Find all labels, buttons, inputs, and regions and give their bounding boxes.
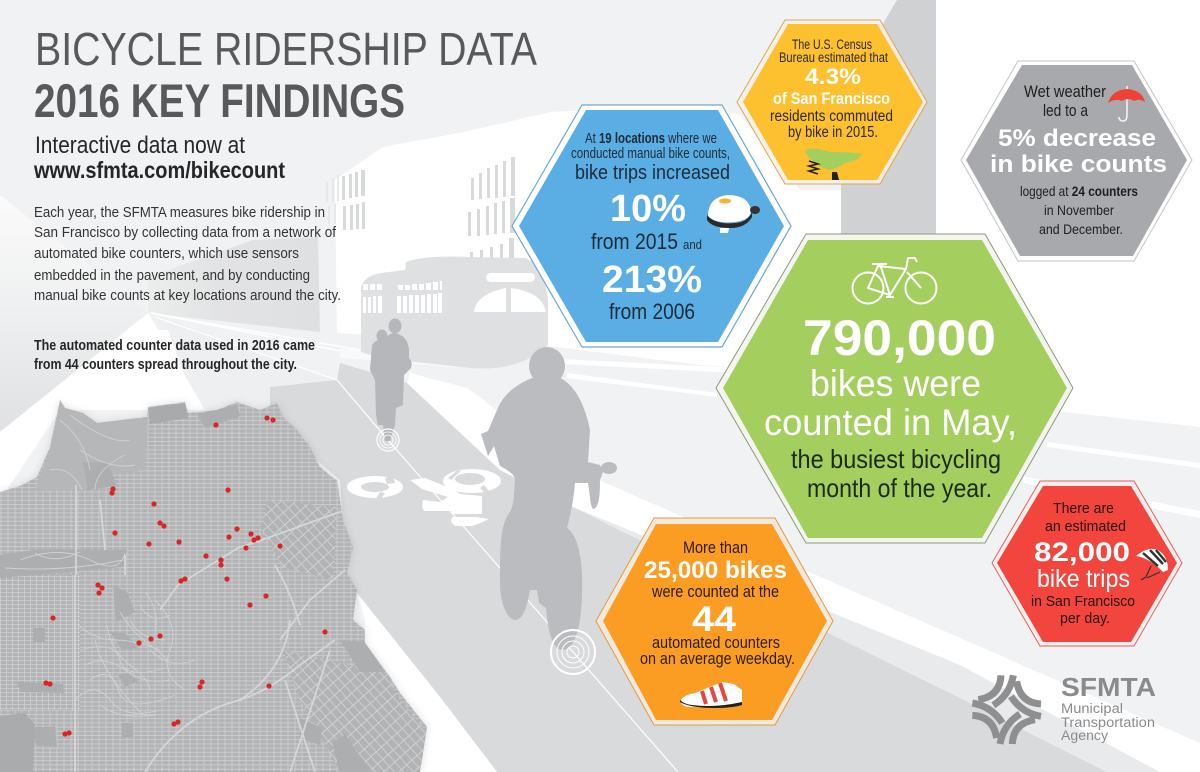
bicycle icon bbox=[852, 258, 936, 304]
intro paragraph: automated bike counters, which use sensors bbox=[34, 245, 299, 262]
weather text bbox=[1020, 82, 1138, 237]
weather text: logged at 24 counters bbox=[1020, 183, 1138, 199]
automated counter note: from 44 counters spread throughout the city. bbox=[34, 357, 297, 373]
umbrella icon bbox=[1108, 86, 1145, 121]
intro paragraph: embedded in the pavement, and by conducting bbox=[34, 267, 310, 284]
blue panel intro text: At 19 locations where we bbox=[585, 131, 717, 147]
blue panel change text: and bbox=[683, 237, 702, 252]
panel: yellow census hexagon bbox=[737, 20, 927, 184]
790,000 figure: 790,000 bbox=[803, 310, 996, 366]
link text: www.sfmta.com/bikecount bbox=[33, 157, 285, 183]
orange panel text: on an average weekday. bbox=[640, 650, 795, 668]
weather text: in November bbox=[1044, 202, 1114, 218]
San Francisco label: of San Francisco bbox=[773, 89, 890, 108]
streetcar bbox=[361, 257, 548, 369]
red panel text: per day. bbox=[1060, 610, 1110, 627]
lane centre line bbox=[155, 317, 678, 772]
bike lane pavement marking bbox=[347, 469, 501, 526]
SFMTA logo mark bbox=[972, 675, 1041, 744]
25,000 bikes figure: 25,000 bikes bbox=[644, 557, 787, 584]
intro paragraph bbox=[34, 204, 341, 304]
bike trips text: bike trips bbox=[1037, 565, 1130, 593]
automated counter note bbox=[34, 338, 315, 373]
4.3% figure: 4.3% bbox=[805, 64, 861, 89]
panel: blue manual counts hexagon bbox=[512, 105, 791, 347]
orange panel text: More than bbox=[683, 539, 748, 557]
weather text: Wet weather bbox=[1024, 82, 1106, 101]
orange panel text: were counted at the bbox=[651, 583, 779, 601]
blue panel change text: from 2015 bbox=[591, 229, 678, 254]
sensor ring small bbox=[377, 429, 399, 451]
panel: green 790,000 hexagon bbox=[716, 234, 1073, 543]
blue panel change text bbox=[591, 229, 702, 324]
helmet icon bbox=[1136, 549, 1168, 580]
blue panel change text: from 2006 bbox=[609, 299, 695, 324]
5% decrease statement: in bike counts bbox=[990, 151, 1167, 178]
bell icon bbox=[707, 195, 760, 233]
title bbox=[34, 23, 537, 127]
red panel text: There are bbox=[1053, 500, 1114, 517]
panel: orange 25,000 bikes hexagon bbox=[596, 518, 833, 725]
census text: The U.S. Census bbox=[792, 37, 872, 52]
link text bbox=[33, 132, 285, 183]
automated counter note: The automated counter data used in 2016 came bbox=[34, 338, 315, 354]
blue panel intro text: conducted manual bike counts, bbox=[571, 146, 730, 162]
SFMTA wordmark: SFMTA bbox=[1061, 672, 1156, 702]
intro paragraph: Each year, the SFMTA measures bike ridership in bbox=[34, 204, 325, 221]
busiest month text bbox=[791, 444, 1001, 503]
orange panel text bbox=[640, 539, 795, 668]
blue panel intro text bbox=[571, 131, 730, 184]
blue panel intro text: bike trips increased bbox=[575, 162, 730, 184]
busiest month text: the busiest bicycling bbox=[791, 444, 1001, 474]
SFMTA wordmark: Transportation bbox=[1061, 715, 1155, 730]
SFMTA wordmark bbox=[1061, 672, 1156, 743]
SFMTA wordmark: Municipal bbox=[1061, 701, 1123, 716]
5% decrease statement bbox=[990, 125, 1167, 178]
panel: red 82,000 trips hexagon bbox=[992, 481, 1182, 646]
red panel text: in San Francisco bbox=[1031, 593, 1135, 610]
map of San Francisco with 44 counter locations bbox=[0, 380, 440, 772]
census text: residents commuted bbox=[770, 108, 893, 125]
busiest month text: month of the year. bbox=[807, 473, 992, 503]
orange panel text: automated counters bbox=[652, 634, 780, 652]
intro paragraph: manual bike counts at key locations around the city. bbox=[34, 287, 341, 304]
weather text: led to a bbox=[1043, 101, 1088, 120]
bike seat icon bbox=[805, 149, 862, 180]
bikes were counted statement bbox=[764, 363, 1017, 443]
building windows bbox=[326, 157, 515, 260]
10% figure: 10% bbox=[610, 188, 686, 230]
bikes were counted statement: counted in May, bbox=[764, 402, 1017, 443]
weather text: and December. bbox=[1039, 221, 1123, 237]
link text: Interactive data now at bbox=[35, 132, 245, 159]
red panel text: an estimated bbox=[1045, 518, 1126, 535]
red panel text bbox=[1031, 500, 1135, 627]
census text bbox=[770, 37, 893, 141]
sensor ring large bbox=[551, 630, 595, 674]
44 figure: 44 bbox=[692, 600, 737, 639]
82,000 figure: 82,000 bbox=[1034, 537, 1130, 567]
cycling shoe icon bbox=[680, 682, 742, 708]
title: BICYCLE RIDERSHIP DATA bbox=[35, 23, 537, 75]
red counter dots bbox=[43, 415, 328, 737]
panel: gray wet weather hexagon bbox=[961, 61, 1192, 261]
213% figure: 213% bbox=[602, 259, 702, 301]
census text: by bike in 2015. bbox=[788, 124, 878, 141]
pedestrians silhouette bbox=[370, 318, 412, 441]
bikes were counted statement: bikes were bbox=[810, 363, 981, 404]
census text: Bureau estimated that bbox=[779, 50, 888, 65]
intro paragraph: San Francisco by collecting data from a network of bbox=[34, 224, 337, 241]
SFMTA wordmark: Agency bbox=[1061, 728, 1108, 743]
5% decrease statement: 5% decrease bbox=[998, 125, 1156, 152]
title: 2016 KEY FINDINGS bbox=[34, 74, 405, 127]
cyclist silhouette bbox=[481, 347, 617, 650]
